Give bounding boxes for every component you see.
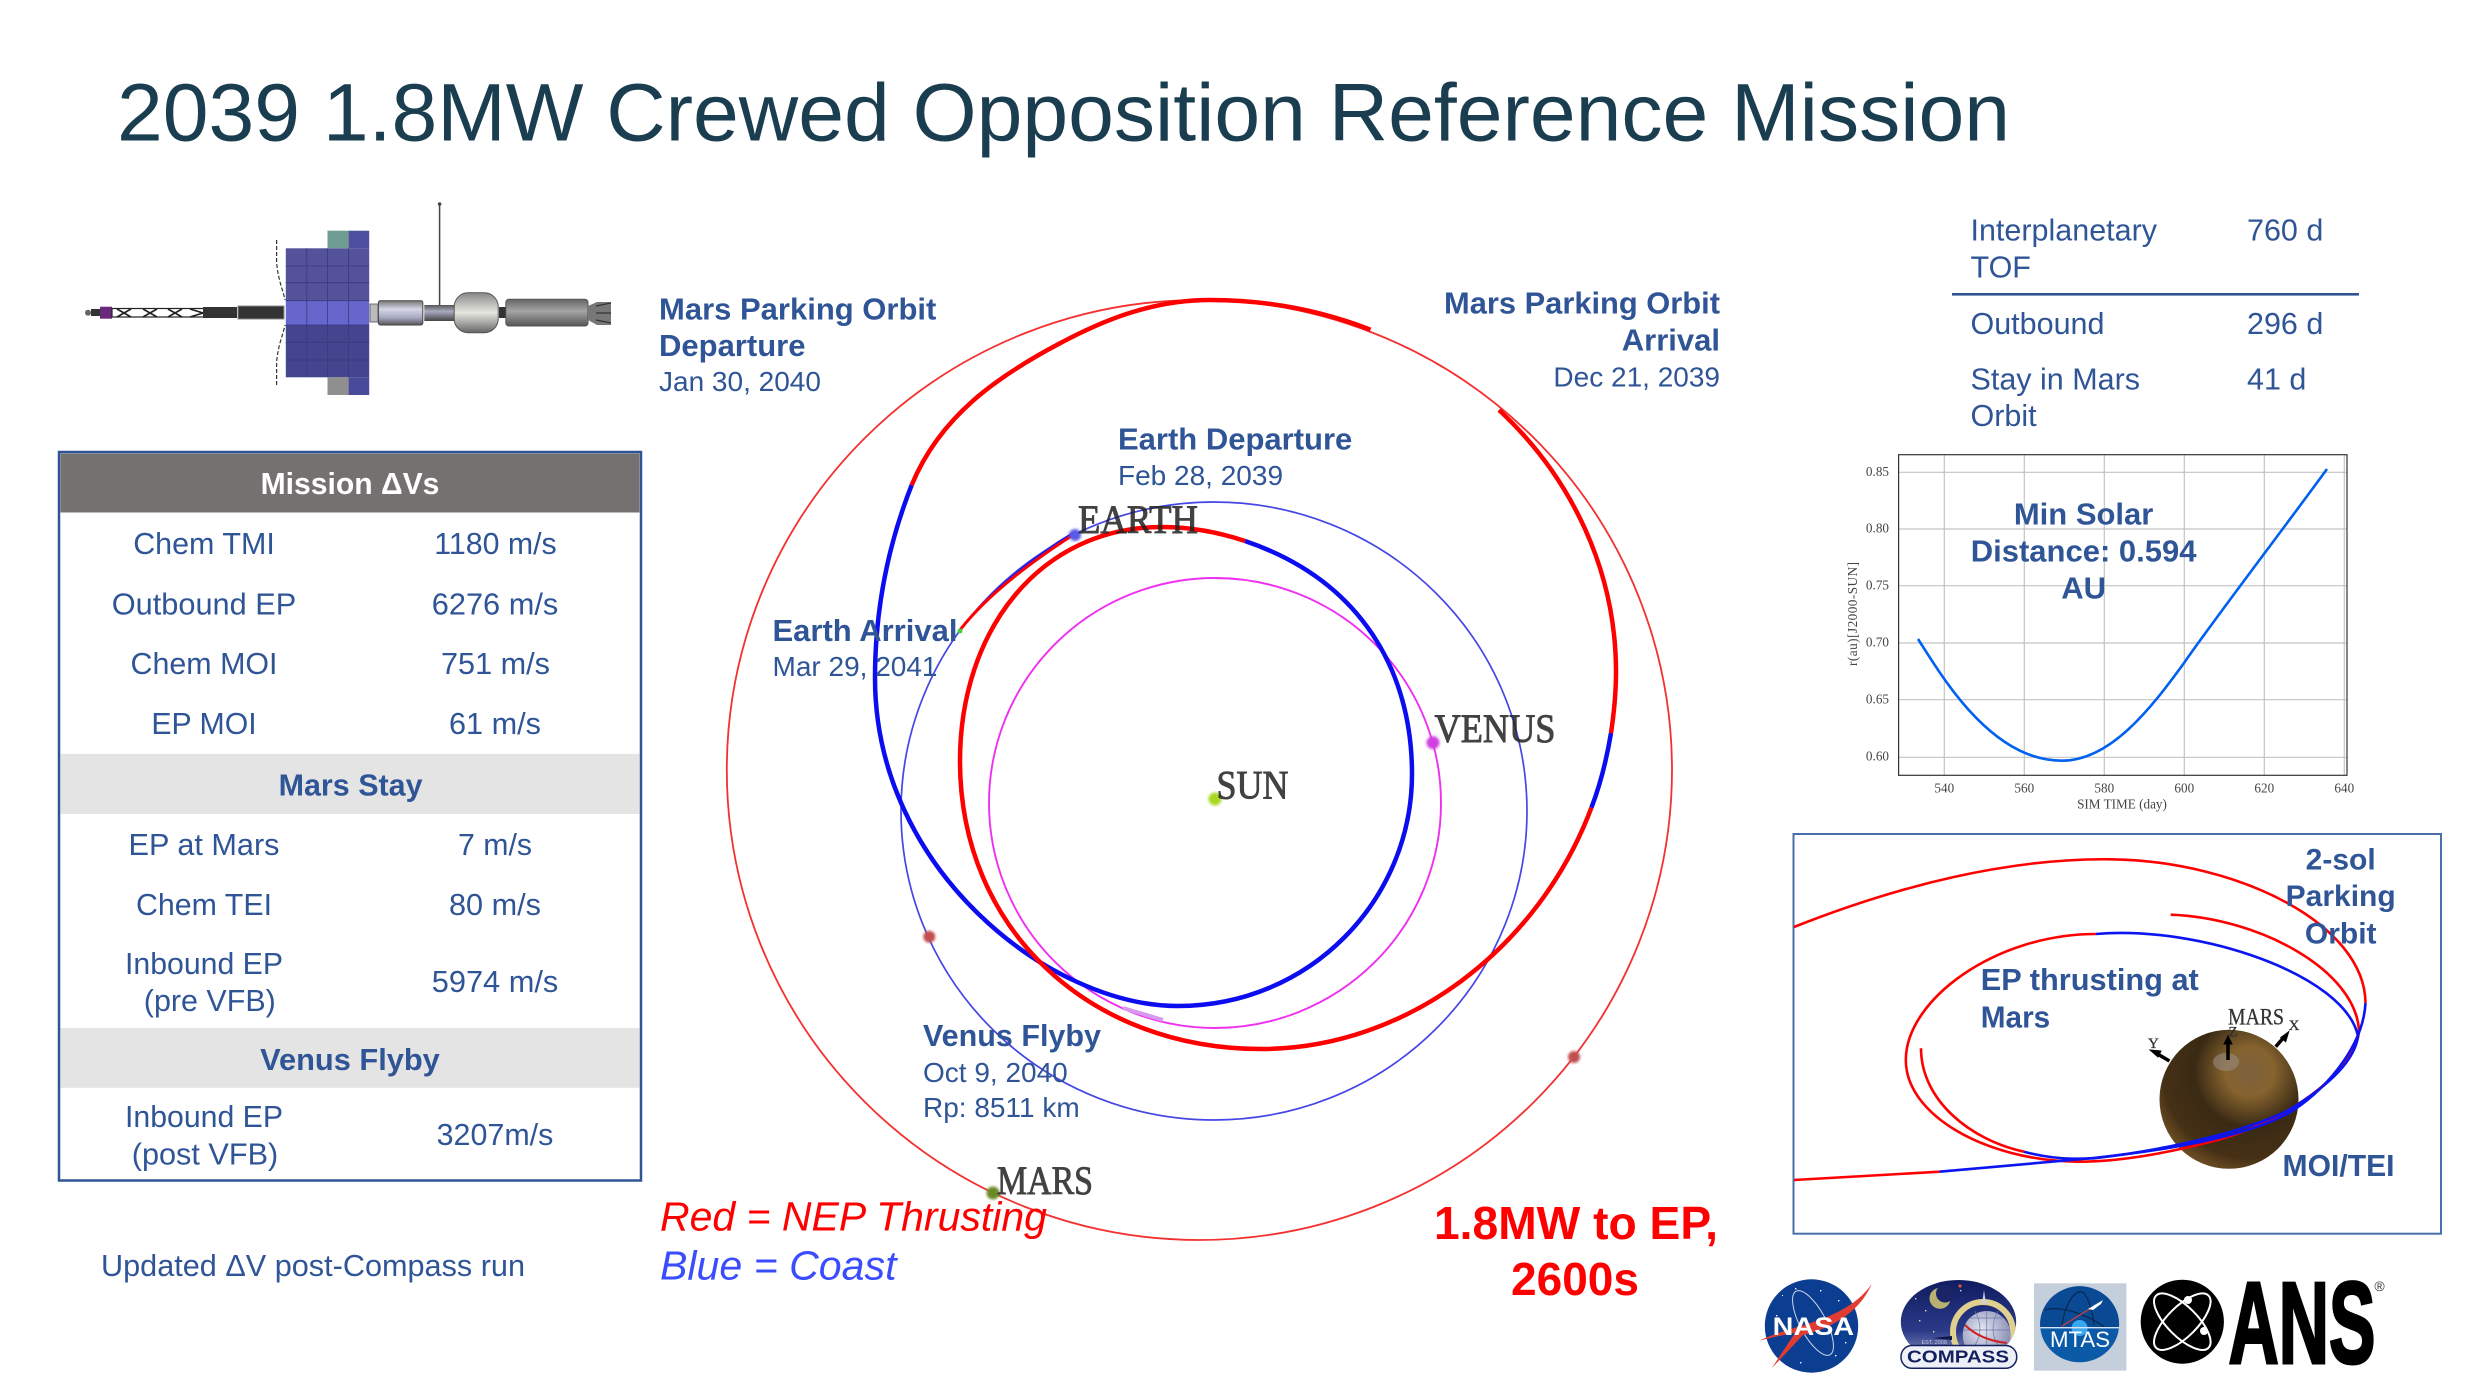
table background and borders [59,452,641,1180]
label: VENUS: VENUS [1434,706,1556,751]
label: Earth Arrival: Mar 29, 2041 [772,651,938,682]
section: Venus Flyby [60,1028,640,1088]
planet Mars [2160,1030,2298,1169]
y axis ticks [1866,464,1889,764]
callout: power and specific impulse [1434,1197,1718,1305]
marker: Earth-orbit position [923,931,935,943]
orbit diagram [727,300,1672,1240]
y axis ticks: 0.65 [1866,691,1889,706]
row: Inbound EP post VFB: Inbound EP [125,1100,283,1134]
legend: line colours: Red = NEP Thrusting [660,1194,1047,1240]
row: Chem TMI [133,527,557,561]
axis labels [2148,1018,2300,1052]
marker: Mars-orbit position [1568,1051,1580,1063]
axis labels: Y [2148,1036,2159,1052]
panel: Mars orbit detail [1794,834,2441,1234]
chart: solar distance vs sim time [1845,455,2355,811]
section: Mars Stay: Mars Stay [279,768,423,802]
label: Venus Flyby [923,1018,1102,1123]
annotation: minimum solar distance: Min Solar [2014,496,2153,531]
label: Earth Departure: Feb 28, 2039 [1118,460,1283,491]
title: 2039 1.8MW Crewed Opposition Reference Mission [117,68,2010,159]
label: Mars Parking Orbit Arrival: Mars Parking Orbit [1444,286,1720,321]
label: Mars Parking Orbit Arrival: Arrival [1622,323,1720,358]
callout: power and specific impulse: 2600s [1511,1253,1639,1305]
callout: power and specific impulse: 1.8MW to EP, [1434,1197,1718,1249]
x axis title: SIM TIME (day) [2077,796,2167,811]
header row [60,454,640,512]
row: EP MOI: 61 m/s [449,707,541,741]
marker: Venus [1426,736,1440,749]
label: 2-sol Parking Orbit: Parking [2286,880,2396,913]
row: Chem TMI: 1180 m/s [434,527,557,561]
label: Venus Flyby: Rp: 8511 km [923,1092,1080,1123]
label: Venus Flyby: Oct 9, 2040 [923,1057,1068,1088]
label: EARTH: EARTH [1078,497,1198,542]
header rule [1952,293,2359,296]
x axis ticks: 640 [2334,780,2355,795]
row: Chem TMI: Chem TMI [133,527,275,561]
row: Outbound: 296 d [2247,307,2323,341]
antenna mast [438,202,441,305]
label: Mars Parking Orbit Departure: Departure [659,328,805,363]
x axis ticks: 540 [1934,780,1955,795]
marker: Sun [1208,792,1222,806]
x axis ticks: 600 [2174,780,2195,795]
panel frame [1794,834,2441,1234]
axis labels: X [2289,1018,2300,1034]
y axis ticks: 0.70 [1866,635,1889,650]
Earth departure coast segment [985,532,1075,602]
distance curve [1918,469,2327,761]
label: Mars Parking Orbit Departure: Jan 30, 2040 [659,366,821,397]
y axis ticks: 0.75 [1866,577,1889,592]
coast arcs in blue [875,485,1611,1006]
label: EP thrusting at Mars: Mars [1981,999,2050,1034]
x axis ticks: 580 [2094,780,2115,795]
label: MOI/TEI: MOI/TEI [2282,1148,2394,1183]
logo: COMPASS: EST. 2008 [1922,1340,1947,1346]
logo: ANS: ® [2374,1278,2385,1294]
label: Mars Parking Orbit Arrival: Dec 21, 2039 [1553,361,1720,392]
Mars orbit [727,300,1672,1240]
row: Chem MOI [130,647,550,681]
header row: Mission ΔVs [261,467,439,501]
grid [1899,455,2347,775]
row: EP MOI: EP MOI [151,707,257,741]
y axis title: r(au)[J2000-SUN] [1845,562,1860,666]
row: Chem TEI: 80 m/s [449,888,541,922]
row: Outbound EP [112,587,558,621]
label: Mars Parking Orbit Arrival [1444,286,1720,392]
row: Inbound EP post VFB [125,1100,553,1171]
x axis ticks: 560 [2014,780,2035,795]
axis arrows [2150,1032,2289,1061]
row: EP at Mars: EP at Mars [128,828,280,862]
marker: Earth [1069,529,1081,541]
label: Venus Flyby: Venus Flyby [923,1018,1102,1053]
y axis ticks: 0.80 [1866,521,1889,536]
label: SUN: SUN [1216,763,1288,808]
radiator panels [277,231,369,395]
legend: line colours [660,1194,1047,1288]
section: Venus Flyby: Venus Flyby [260,1043,440,1077]
marker: Mars [986,1186,1000,1200]
x axis ticks [1934,780,2355,795]
row: Chem MOI: 751 m/s [441,647,550,681]
x axis ticks: 620 [2254,780,2275,795]
parking orbit trajectories, red [1794,859,2366,1180]
row: Inbound EP post VFB: 3207m/s [437,1118,553,1152]
logo: COMPASS: COMPASS [1907,1346,2009,1366]
row: Stay in Mars Orbit: 41 d [2247,362,2306,396]
y axis ticks: 0.60 [1866,749,1889,764]
label: EP thrusting at Mars [1981,962,2199,1034]
row: Inbound EP pre VFB: (pre VFB) [144,984,276,1018]
y axis ticks: 0.85 [1866,464,1889,479]
row: Interplanetary TOF: TOF [1970,250,2031,284]
row: Inbound EP pre VFB: 5974 m/s [432,965,558,999]
axis labels: Z [2228,1025,2238,1041]
Venus orbit [989,578,1441,1028]
row: Outbound: Outbound [1970,307,2104,341]
row: Outbound [1970,307,2323,341]
plot frame [1899,455,2347,775]
marker: Earth arrival [958,628,962,634]
Earth orbit [901,502,1527,1120]
row: Inbound EP post VFB: (post VFB) [132,1137,278,1171]
row: Interplanetary TOF: Interplanetary [1970,214,2158,248]
label: EP thrusting at Mars: EP thrusting at [1981,962,2199,997]
row: Chem TEI [136,888,541,922]
truss [85,306,284,319]
panel: Mission Delta-V table [59,452,641,1180]
row: Interplanetary TOF [1970,214,2323,284]
label: Earth Departure: Earth Departure [1118,422,1352,456]
row: Inbound EP pre VFB [125,947,558,1018]
label: Earth Departure [1118,422,1352,491]
row: Stay in Mars Orbit: Orbit [1970,399,2037,433]
logo: ANS [2141,1258,2385,1388]
label: Earth Arrival: Earth Arrival [772,613,957,648]
logo: NASA [1759,1279,1872,1373]
section: Mars Stay [60,754,640,814]
note: updated delta-V: Updated ΔV post-Compass run [101,1249,525,1283]
parking orbit trajectories, blue [1940,933,2366,1172]
label: Mars Parking Orbit Departure: Mars Parking Orbit [659,292,936,327]
logo: NASA: NASA [1773,1313,1854,1341]
label: 2-sol Parking Orbit: Orbit [2305,917,2377,950]
label: Earth Arrival [772,613,957,682]
row: Outbound EP: Outbound EP [112,587,296,621]
spacecraft illustration [85,202,611,395]
annotation: minimum solar distance: AU [2061,570,2106,605]
label: 2-sol Parking Orbit: 2-sol [2306,843,2376,876]
label: MARS: MARS [2228,1004,2284,1029]
row: Stay in Mars Orbit: Stay in Mars [1970,362,2140,396]
panel: time of flight table [1952,214,2359,433]
row: Chem TEI: Chem TEI [136,888,272,922]
Venus flyby thrust arc [1123,1008,1163,1020]
habitat and tanks [370,293,611,333]
label: Mars Parking Orbit Departure [659,292,936,397]
label: 2-sol Parking Orbit [2286,843,2396,950]
row: Chem MOI: Chem MOI [130,647,278,681]
logo: ANS: ANS [2228,1258,2376,1388]
row: EP MOI [151,707,541,741]
annotation: minimum solar distance: Distance: 0.594 [1971,534,2197,569]
label: MARS: MARS [997,1158,1093,1203]
polar highlight [2213,1053,2239,1071]
row: Outbound EP: 6276 m/s [432,587,558,621]
legend: line colours: Blue = Coast [660,1242,898,1288]
row: EP at Mars [128,828,532,862]
row: Inbound EP pre VFB: Inbound EP [125,947,283,981]
logo: MTAS: MTAS [2050,1327,2110,1352]
row: EP at Mars: 7 m/s [458,828,532,862]
logo: COMPASS [1901,1280,2017,1368]
annotation: minimum solar distance [1971,496,2197,605]
row: Stay in Mars Orbit [1970,362,2306,433]
logo: MTAS [2034,1283,2126,1371]
thrust arcs in red [912,300,1616,1049]
row: Interplanetary TOF: 760 d [2247,214,2323,248]
